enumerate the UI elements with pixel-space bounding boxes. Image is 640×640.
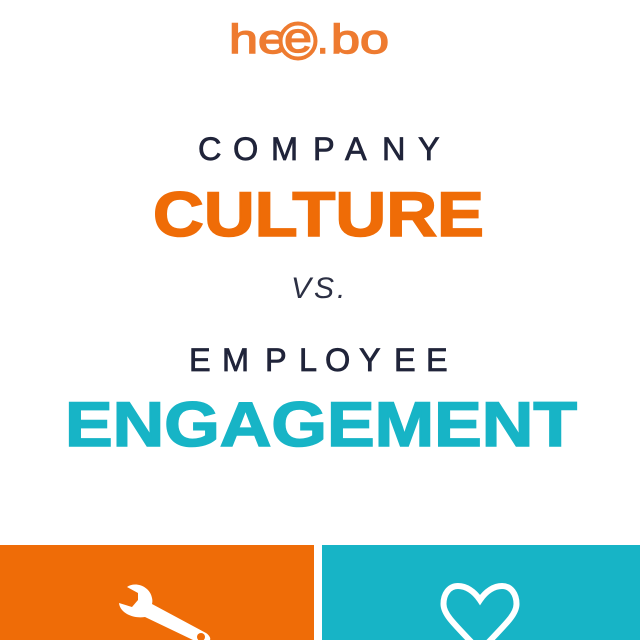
logo: hee.bo	[229, 14, 389, 62]
panel: engagement	[322, 545, 640, 640]
logo: hee.bo: he	[229, 16, 287, 62]
heading: company: COMPANY	[198, 131, 440, 167]
text: vs.: VS.	[291, 272, 345, 305]
panel: culture	[0, 545, 314, 640]
heading: culture: CULTURE	[153, 180, 484, 250]
heading: employee: EMPLOYEE	[189, 342, 448, 378]
logo: hee.bo: bo	[331, 16, 389, 62]
logo: hee.bo: .	[317, 16, 328, 62]
logo: hee.bo: e	[284, 14, 312, 61]
heading: engagement: ENGAGEMENT	[65, 390, 577, 460]
icon: wrench	[119, 584, 210, 640]
icon: heart	[444, 586, 516, 640]
